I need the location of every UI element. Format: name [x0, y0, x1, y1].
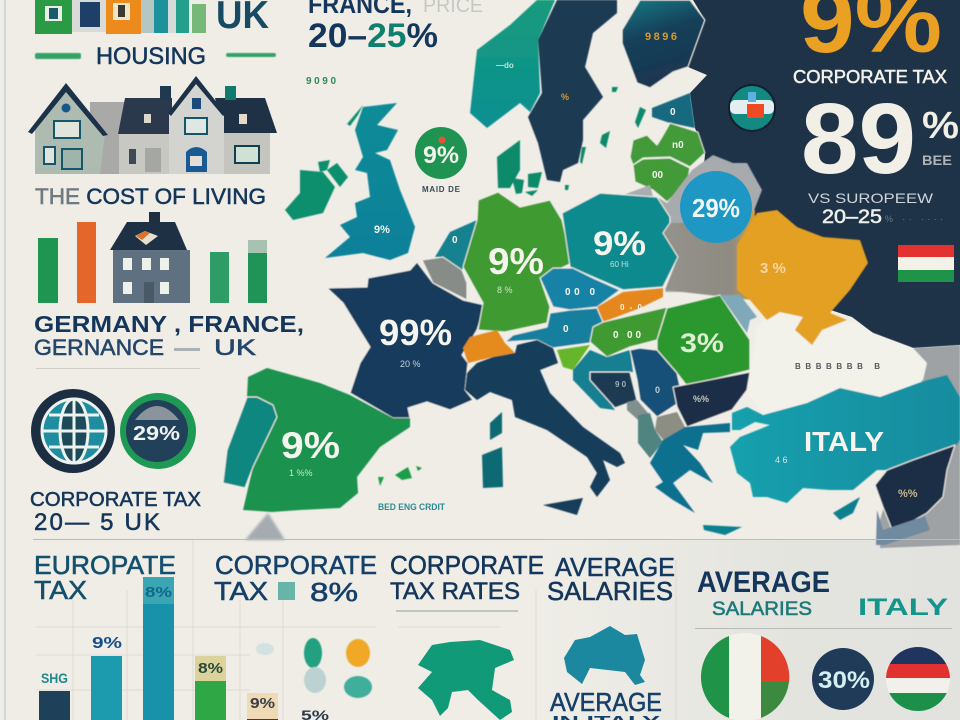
map: Bosnia — [590, 372, 637, 408]
map: Sicily — [543, 498, 583, 515]
label: small country values: %% — [693, 394, 709, 404]
house: right roof — [215, 86, 277, 174]
label: Mediterranean caption: BED ENG CRDIT — [378, 502, 445, 512]
heading: Corporate Tax Rates — [390, 550, 544, 612]
badge: blue 29% circle: 29% — [692, 193, 740, 223]
label: Romania 3%: 3% — [680, 328, 724, 358]
chart: corporate bars — [195, 656, 330, 720]
map: Norway — [470, 0, 555, 128]
heading: Average Salaries Italy: ITALY — [858, 594, 948, 621]
map: Croatia — [573, 350, 633, 410]
map: Moldova — [720, 295, 757, 333]
label: small country values: —do — [496, 61, 514, 70]
heading: Corporate Tax 8%: CORPORATE — [215, 550, 377, 580]
label: France 99%: 20 % — [400, 359, 421, 369]
text: vs europe: VS SUROPEEW — [808, 190, 934, 206]
heading: cost of living: THE COST OF LIVING — [35, 184, 266, 209]
heading: Corporate Tax 8% — [214, 550, 377, 607]
chart: tax bars: 9% — [92, 635, 122, 652]
heading: Corporate Tax 8%: 8% — [310, 577, 358, 607]
label: small country values: 0 00 — [613, 330, 641, 341]
map: Slovakia — [597, 288, 663, 322]
map: Corsica — [490, 412, 502, 440]
heading: Germany, France: GERMANY , FRANCE, — [34, 311, 304, 337]
label: small country values: 00 — [652, 170, 664, 181]
map: Czech Republic — [540, 268, 620, 310]
heading: Eurorate Tax — [34, 550, 176, 605]
map: Poland — [562, 193, 678, 290]
label: small country values: n0 — [672, 140, 684, 151]
chart: corporate bars: 8% — [198, 660, 223, 677]
map: Serbia — [630, 348, 683, 417]
heading: 20-25%: 20–25% — [308, 17, 438, 55]
map: United Kingdom — [325, 103, 415, 260]
heading: corporate tax right: CORPORATE TAX — [793, 67, 947, 87]
map: Slovenia — [557, 345, 590, 370]
left column: top bars — [35, 0, 206, 34]
text: small green label: 9090 — [306, 76, 336, 87]
map: Latvia — [630, 123, 705, 167]
label: small country values — [374, 61, 918, 500]
icon: Hungary flag circle — [885, 646, 951, 713]
icon: teal badge — [728, 84, 776, 132]
icon: 29% dial: 29% — [133, 423, 180, 445]
map: Italy — [465, 340, 625, 497]
map: Hungary — [590, 307, 667, 357]
map: Germany — [463, 192, 572, 332]
badge: green 9% circle: MAID DE — [422, 185, 461, 194]
map: Sweden — [528, 0, 617, 182]
map: Syria — [875, 445, 955, 532]
heading: Corporate Tax Rates: CORPORATE — [390, 550, 544, 580]
map: Romania — [657, 295, 750, 386]
map: Belarus — [657, 155, 762, 300]
map: North Macedonia — [655, 412, 685, 442]
heading: Eurorate Tax: TAX — [34, 575, 87, 605]
label: small country values: 0 — [452, 235, 458, 246]
text: average in Italy: AVERAGE — [550, 687, 662, 717]
icon: globe — [31, 389, 115, 473]
map: Crete and Cyprus — [703, 497, 860, 535]
label: small country values: 0 — [563, 324, 569, 335]
map: Spain — [243, 368, 410, 512]
heading: Average Salaries Italy — [695, 566, 952, 629]
map: Montenegro — [627, 400, 648, 420]
map: Belgium — [422, 257, 467, 300]
dark panel text — [793, 0, 959, 282]
badge: 30%: 30% — [818, 667, 870, 694]
heading: Gernance UK: GERNANCE — [34, 335, 164, 360]
map: Sardinia — [482, 447, 503, 488]
label: Spain 9%: 9% — [281, 425, 340, 466]
chart: tax bars: 8% — [145, 584, 172, 601]
badge: blue 29% circle — [680, 171, 752, 243]
text: 20-25: 20–25 — [822, 207, 882, 228]
icon: blue map — [564, 626, 645, 685]
icon: world map — [418, 640, 514, 720]
house: left gable — [28, 83, 108, 174]
map: Ireland — [285, 105, 363, 220]
map of Europe — [223, 0, 960, 548]
heading: Average Salaries — [547, 552, 675, 606]
icon: house on chart — [110, 212, 190, 303]
label: Turkey ITALY: 4 6 — [775, 455, 788, 465]
label: Spain 9%: 1 %% — [289, 468, 313, 478]
map: Kaliningrad — [623, 185, 653, 198]
label: Turkey ITALY — [775, 426, 884, 465]
label: small country values: 9% — [374, 224, 390, 236]
label: Ukraine 3%: 3 % — [760, 260, 786, 277]
grey shape near Spain — [245, 513, 285, 540]
label: Poland 9%: 9% — [593, 225, 646, 263]
label: Germany 9%: 9% — [488, 241, 544, 282]
map: Austria — [505, 308, 603, 348]
label: small country values: 0-0 — [620, 303, 643, 312]
map: Netherlands — [435, 220, 477, 270]
map background: grey east region — [880, 345, 960, 548]
heading: Corporate Tax Rates: TAX RATES — [390, 578, 520, 605]
map: Albania — [638, 413, 663, 458]
label: Germany 9%: 8 % — [497, 285, 513, 295]
heading: Average Salaries Italy: AVERAGE — [697, 566, 830, 599]
label: Sweden and Finland marks: % — [561, 92, 569, 102]
map: Estonia — [652, 93, 695, 128]
heading: Corporate Tax 8%: TAX — [214, 576, 268, 606]
badge: green 9% circle — [415, 127, 467, 194]
badge: green 9% circle: 9% — [423, 142, 459, 169]
stat: white 89%: % — [922, 105, 959, 147]
map labels — [281, 31, 918, 500]
heading: Gernance UK: UK — [214, 335, 256, 360]
map: Balearic islands — [378, 466, 422, 486]
badge: 30% — [812, 648, 874, 710]
map: Denmark and Baltic islands — [497, 87, 646, 196]
illustration: row of houses — [28, 76, 277, 174]
map: Black Sea — [747, 312, 927, 415]
label: Poland 9%: 60 Hi — [610, 260, 629, 269]
map: Finland — [622, 0, 705, 88]
chart: tax bars — [39, 577, 174, 720]
label: Sweden and Finland marks — [561, 31, 677, 102]
house: middle — [118, 86, 172, 174]
text: small line markers — [35, 53, 276, 59]
map: Greece — [650, 423, 730, 513]
map: Bulgaria — [673, 372, 750, 427]
label: Sweden and Finland marks: 9896 — [645, 31, 677, 43]
dark panel text: % ·· ···· — [885, 214, 943, 224]
heading: Average Salaries: AVERAGE — [555, 552, 675, 582]
house: center gable — [168, 76, 226, 174]
icon: Hungary flag — [898, 245, 954, 282]
map: Switzerland — [463, 330, 515, 363]
map: Levant — [876, 510, 930, 545]
map: Turkey — [730, 375, 960, 503]
stat: white 89%: 89 — [801, 83, 916, 195]
label: France 99%: 99% — [379, 312, 452, 353]
text: small grey label: BEE — [922, 152, 952, 168]
label: small country values: 00 0 — [565, 287, 595, 298]
chart: corporate bars: 9% — [250, 695, 275, 712]
label: small country values: 9 0 — [615, 380, 627, 389]
icons: small region blobs — [256, 638, 372, 698]
label: small country values: 0 — [670, 107, 676, 118]
label: Black Sea caption: BBBBBBB B — [795, 362, 880, 371]
map: France — [327, 262, 485, 418]
map: Ukraine — [737, 210, 868, 345]
icon: 29% dial — [120, 393, 196, 469]
dark panel: right side — [688, 0, 960, 348]
heading: corporate tax left: CORPORATE TAX — [30, 489, 201, 511]
label: Turkey ITALY: ITALY — [804, 426, 884, 457]
map: Lithuania — [633, 158, 690, 202]
heading: Housing: HOUSING — [96, 43, 206, 70]
icon: Italy flag circle — [701, 633, 789, 720]
map: Portugal — [223, 397, 277, 488]
label: small country values: %% — [898, 488, 918, 500]
heading: Average Salaries: SALARIES — [547, 576, 673, 606]
chart: housing bars — [38, 212, 267, 303]
heading: Average Salaries Italy: SALARIES — [712, 599, 812, 620]
label: small country values: 0 — [655, 385, 660, 395]
chart: tax bars: SHG — [41, 670, 68, 686]
heading: Eurorate Tax: EUROPATE — [34, 550, 176, 580]
text: 20-5 UK: 20— 5 UK — [34, 509, 160, 536]
heading: Gernance UK — [34, 335, 256, 360]
